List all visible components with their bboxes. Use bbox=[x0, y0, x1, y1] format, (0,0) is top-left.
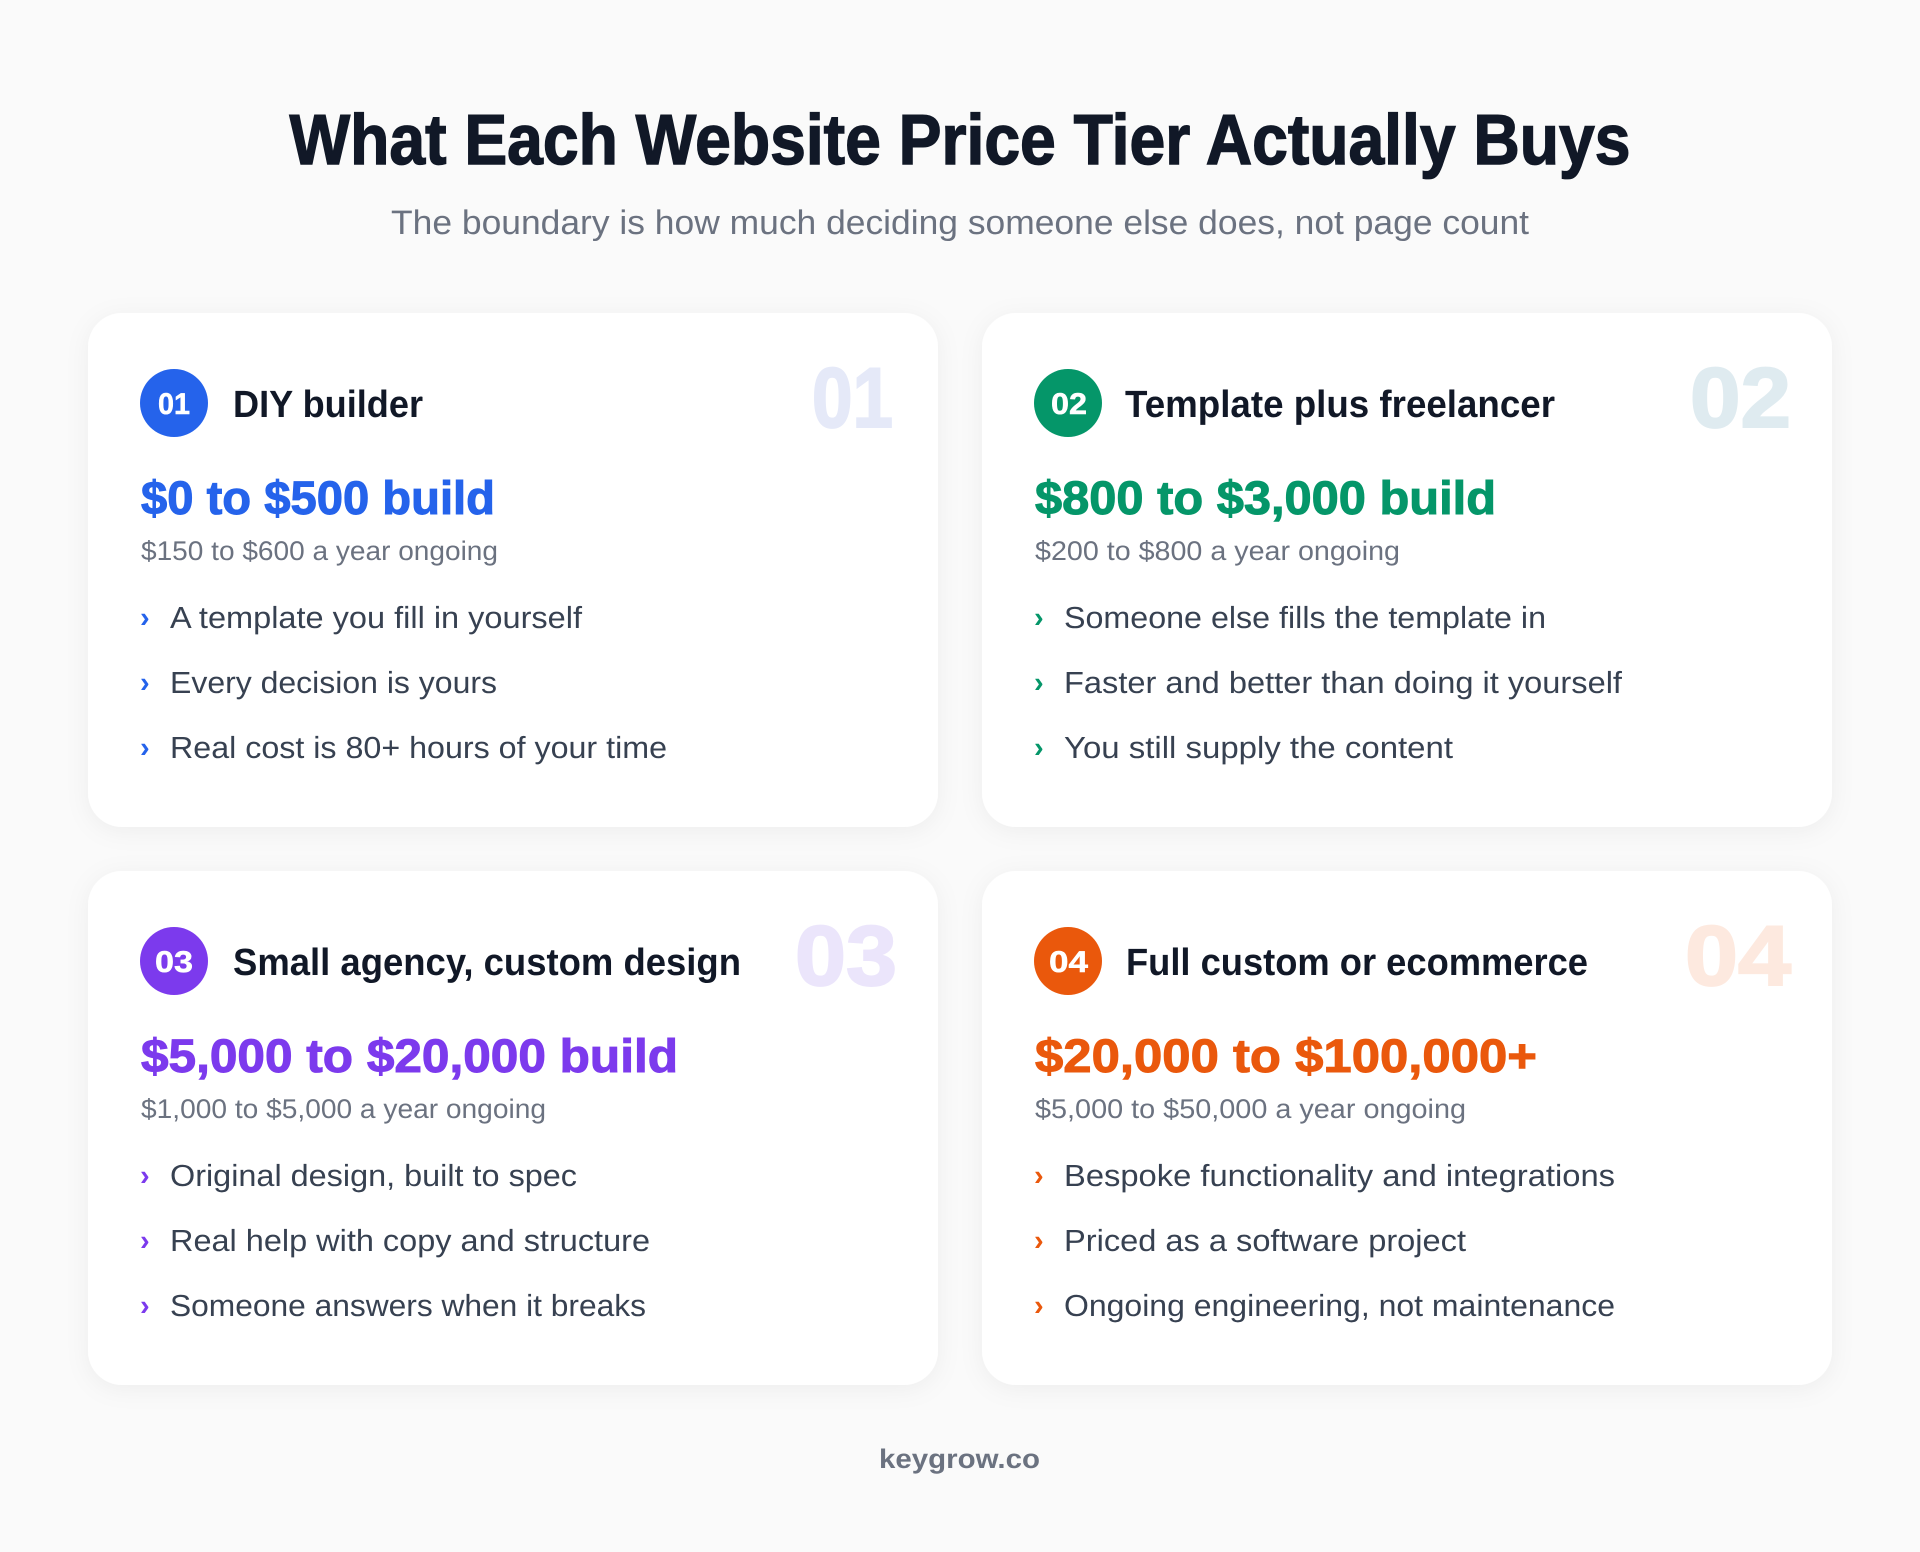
bullet list: › bbox=[140, 1225, 150, 1257]
bullet list: › bbox=[1034, 667, 1044, 699]
bullet list: › bbox=[140, 602, 150, 634]
heading: Template plus freelancer bbox=[1125, 384, 1555, 426]
title: What Each Website Price Tier Actually Buys bbox=[290, 101, 1630, 180]
ongoing cost: $200 to $800 a year ongoing bbox=[1035, 536, 1400, 566]
panel: DIY builder bbox=[88, 313, 938, 827]
bullet list bbox=[140, 601, 667, 765]
number badge 02: 02 bbox=[1051, 388, 1087, 421]
bullet list: › bbox=[1034, 1290, 1044, 1322]
bullet list: › bbox=[1034, 1160, 1044, 1192]
bullet list: Priced as a software project bbox=[1064, 1224, 1467, 1258]
bullet list: › bbox=[140, 1160, 150, 1192]
number badge 01 bbox=[140, 369, 208, 437]
bullet list bbox=[1034, 601, 1623, 765]
heading: DIY builder bbox=[233, 384, 423, 426]
bullet list: Real help with copy and structure bbox=[170, 1224, 650, 1258]
bullet list: › bbox=[1034, 732, 1044, 764]
panel: Small agency, custom design bbox=[88, 871, 938, 1385]
bullet list: Bespoke functionality and integrations bbox=[1064, 1159, 1615, 1193]
footer brand: keygrow.co bbox=[879, 1444, 1040, 1474]
bullet list: A template you fill in yourself bbox=[170, 601, 583, 635]
ongoing cost: $1,000 to $5,000 a year ongoing bbox=[141, 1094, 546, 1124]
bullet list: Faster and better than doing it yourself bbox=[1064, 666, 1623, 700]
number badge 04: 04 bbox=[1049, 946, 1088, 979]
bullet list bbox=[140, 1159, 650, 1323]
number badge 01: 01 bbox=[158, 388, 190, 421]
bullet list: › bbox=[140, 667, 150, 699]
ghost number 02: 02 bbox=[1690, 351, 1791, 446]
bullet list: › bbox=[140, 1290, 150, 1322]
bullet list: You still supply the content bbox=[1064, 731, 1454, 765]
number badge 03 bbox=[140, 927, 208, 995]
ghost number 03: 03 bbox=[795, 909, 897, 1004]
bullet list: › bbox=[140, 732, 150, 764]
bullet list: Original design, built to spec bbox=[170, 1159, 577, 1193]
heading: Small agency, custom design bbox=[233, 942, 741, 984]
bullet list: Real cost is 80+ hours of your time bbox=[170, 731, 667, 765]
heading: Full custom or ecommerce bbox=[1126, 942, 1588, 984]
build price: $5,000 to $20,000 build bbox=[141, 1029, 678, 1082]
bullet list: Someone answers when it breaks bbox=[170, 1289, 646, 1323]
ghost number 04: 04 bbox=[1685, 909, 1791, 1004]
build price: $800 to $3,000 build bbox=[1035, 471, 1496, 524]
bullet list: Every decision is yours bbox=[170, 666, 497, 700]
ghost number 01: 01 bbox=[812, 351, 893, 446]
ongoing cost: $5,000 to $50,000 a year ongoing bbox=[1035, 1094, 1466, 1124]
ongoing cost: $150 to $600 a year ongoing bbox=[141, 536, 498, 566]
build price: $0 to $500 build bbox=[141, 471, 495, 524]
number badge 03: 03 bbox=[155, 946, 193, 979]
panel: Full custom or ecommerce bbox=[982, 871, 1832, 1385]
bullet list: Someone else fills the template in bbox=[1064, 601, 1546, 635]
bullet list: Ongoing engineering, not maintenance bbox=[1064, 1289, 1615, 1323]
bullet list bbox=[1034, 1159, 1615, 1323]
subtitle: The boundary is how much deciding someone else does, not page count bbox=[391, 204, 1530, 242]
bullet list: › bbox=[1034, 1225, 1044, 1257]
number badge 02 bbox=[1034, 369, 1102, 437]
number badge 04 bbox=[1034, 927, 1102, 995]
panel: Template plus freelancer bbox=[982, 313, 1832, 827]
bullet list: › bbox=[1034, 602, 1044, 634]
build price: $20,000 to $100,000+ bbox=[1035, 1029, 1537, 1082]
